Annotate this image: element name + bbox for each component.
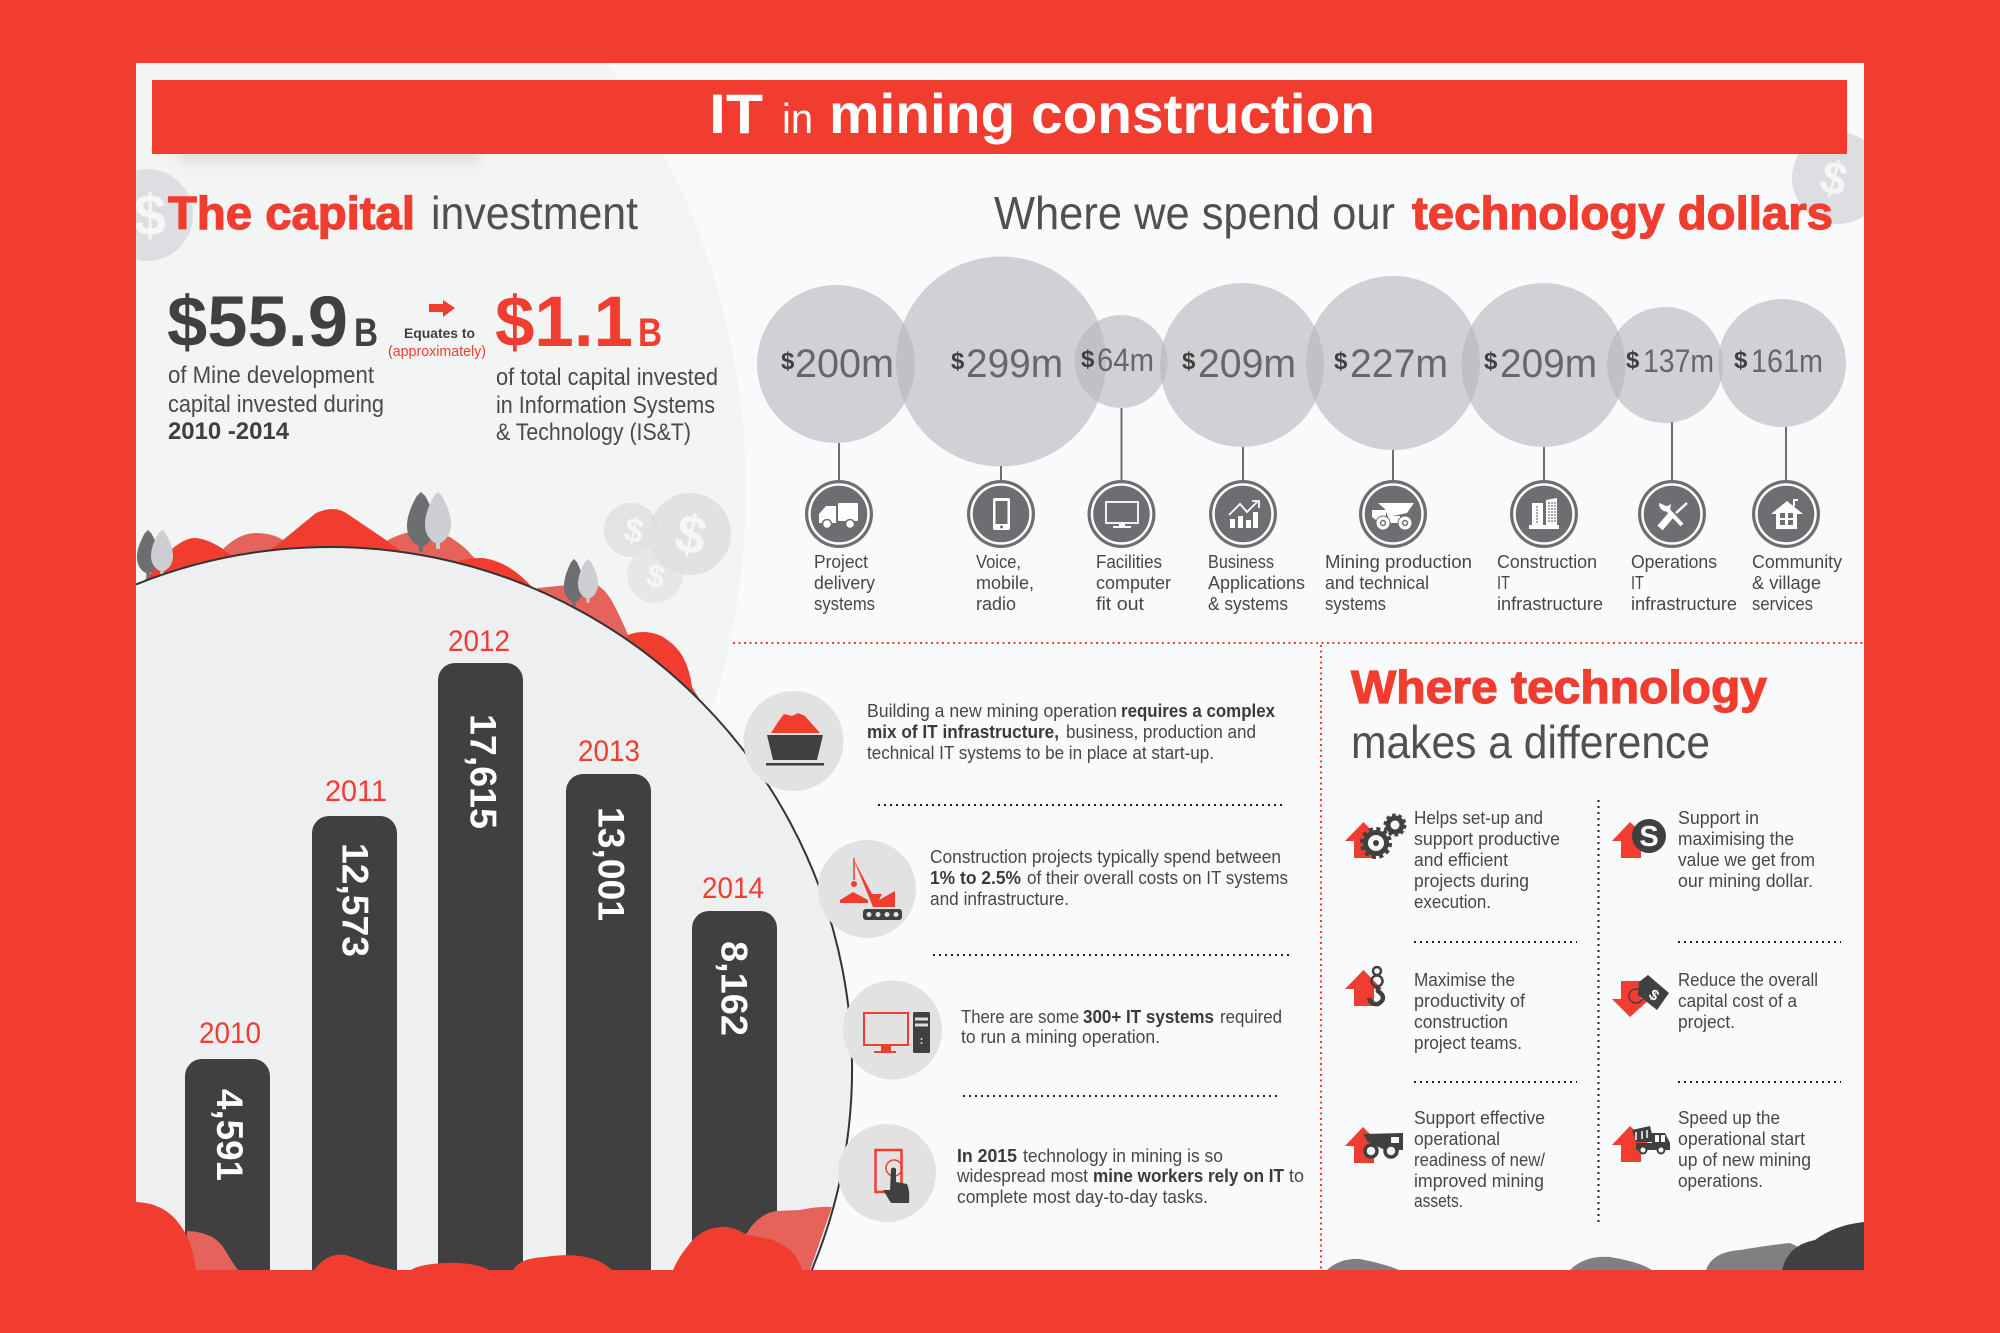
bubble row: spend per category: $ xyxy=(781,348,795,375)
category labels: Community xyxy=(1752,551,1843,572)
bubble row: spend per category: 137m xyxy=(1643,343,1714,379)
text: mine development: capital invested during xyxy=(168,391,384,418)
text: readiness: Support effective xyxy=(1414,1107,1545,1128)
category labels: systems xyxy=(1325,593,1386,614)
hills above the chart circle xyxy=(136,509,700,700)
title banner: in xyxy=(782,95,813,142)
chart circle background xyxy=(136,547,852,1270)
bar 2013: 13,001 xyxy=(590,807,632,921)
stat: 55.9B: $55.9 xyxy=(167,283,348,362)
icon: tools xyxy=(1638,480,1706,548)
category labels: radio xyxy=(976,593,1016,614)
bar 2012 xyxy=(438,625,523,1270)
heading: where technology makes a difference: makes a difference xyxy=(1351,716,1710,768)
bottom right grey hills xyxy=(1327,1222,1864,1270)
text: reduce cost xyxy=(1678,969,1818,1032)
text: 2015 workers: technology in mining is so xyxy=(1023,1145,1223,1166)
bubble row: spend per category: $ xyxy=(1081,346,1095,373)
category labels: IT xyxy=(1497,572,1510,593)
text: 300+ systems: 300+ IT systems xyxy=(1083,1006,1214,1027)
heading: the capital investment: The capital xyxy=(168,187,415,239)
bar 2012: 2012 xyxy=(448,625,510,658)
connector lines xyxy=(839,408,1786,480)
text: set-up: support productive xyxy=(1414,828,1560,849)
banner shadow xyxy=(180,150,480,162)
text: 2015 workers: In 2015 xyxy=(957,1145,1017,1166)
icon: business chart xyxy=(1209,480,1277,548)
category labels: mobile, xyxy=(976,572,1034,593)
title banner: IT xyxy=(709,82,763,145)
heading: where we spend xyxy=(994,187,1833,239)
bubble row: spend per category: 209m xyxy=(1500,342,1597,386)
text: productivity: Maximise the xyxy=(1414,969,1515,990)
icon: arrow down with price tag: $ xyxy=(1645,986,1663,1005)
bottom red hills xyxy=(136,1202,832,1270)
category labels: Facilities xyxy=(1096,551,1162,572)
bubble row: spend per category: $ xyxy=(951,348,965,375)
text: 2015 workers: mine workers rely on IT xyxy=(1093,1165,1285,1186)
bubble row: spend per category: 227m xyxy=(1350,342,1448,386)
title banner: mining construction xyxy=(829,82,1375,145)
stat: 1.1B: B xyxy=(638,311,662,355)
icon: arrow up with tipper truck xyxy=(1612,1126,1670,1162)
text: set-up xyxy=(1414,807,1560,912)
category labels: Project xyxy=(814,551,868,572)
text: complex mix: business, production and xyxy=(1066,721,1256,742)
bar 2014: 2014 xyxy=(702,872,764,905)
bubble row: spend per category: $ xyxy=(1182,348,1196,375)
category labels: Mining production xyxy=(1325,551,1472,572)
icon: tablet touch xyxy=(838,1124,936,1222)
arrow: equates to: Equates to xyxy=(404,325,475,341)
heading: the capital investment xyxy=(168,187,638,239)
category labels: services xyxy=(1752,593,1813,614)
text: value: Support in xyxy=(1678,807,1759,828)
bubble row: spend per category: $ xyxy=(1734,347,1748,374)
text: productivity: productivity of xyxy=(1414,990,1526,1011)
bubble row: spend per category: $ xyxy=(1334,348,1348,375)
text: complex mix: requires a complex xyxy=(1121,700,1276,721)
text: complex mix: mix of IT infrastructure, xyxy=(867,721,1059,742)
heading: where technology makes a difference: Where technology xyxy=(1351,661,1767,713)
text: 2015 workers: widespread most xyxy=(956,1165,1088,1186)
arrow: equates to xyxy=(388,300,486,360)
category labels: delivery xyxy=(814,572,876,593)
bubble row: spend per category: $ xyxy=(1484,348,1498,375)
text: speed up: operations. xyxy=(1678,1170,1763,1191)
icon: house xyxy=(1752,480,1820,548)
bubble row: spend per category: 64m xyxy=(1097,342,1154,378)
text: reduce cost: capital cost of a xyxy=(1678,990,1798,1011)
text: value: value we get from xyxy=(1678,849,1815,870)
category labels: Applications xyxy=(1208,572,1305,593)
category labels: Construction xyxy=(1497,551,1597,572)
icon: dollar coin top left xyxy=(136,169,193,261)
category labels: systems xyxy=(814,593,875,614)
text: 300+ systems xyxy=(961,1006,1282,1047)
icon: arrow up with dump truck xyxy=(1345,1127,1403,1163)
icon: arrow up with gears xyxy=(1345,815,1405,858)
text: value: maximising the xyxy=(1678,828,1794,849)
text: speed up: operational start xyxy=(1678,1128,1805,1149)
icon: mobile phone xyxy=(967,480,1035,548)
text: total capital invested: of total capital invested xyxy=(496,364,718,391)
bubble row: spend per category: 299m xyxy=(966,342,1063,386)
category labels: Business xyxy=(1208,551,1274,572)
text: total capital invested: in Information Systems xyxy=(496,392,715,419)
text: readiness xyxy=(1414,1107,1546,1211)
bar 2011 xyxy=(312,775,397,1270)
category labels: infrastructure xyxy=(1497,593,1603,614)
text: complex mix: technical IT systems to be in place at start-up. xyxy=(867,742,1214,763)
text: mine development: of Mine development xyxy=(168,362,374,389)
text: speed up: up of new mining xyxy=(1678,1149,1811,1170)
bar 2011: 12,573 xyxy=(334,843,376,957)
text: construction spend: 1% to 2.5% xyxy=(930,867,1021,888)
text: speed up: Speed up the xyxy=(1678,1107,1780,1128)
white content panel xyxy=(136,63,1864,1270)
text: 2015 workers xyxy=(956,1145,1304,1207)
icon: arrow up with dollar xyxy=(1612,819,1666,858)
icon: computer monitor xyxy=(1088,480,1156,548)
icon: arrow down with price tag xyxy=(1612,975,1669,1017)
bar chart: capital by year xyxy=(185,625,777,1270)
text: mine development xyxy=(168,362,384,445)
bar 2014: 8,162 xyxy=(714,941,754,1036)
text: complex mix: Building a new mining operation xyxy=(867,700,1117,721)
text: speed up xyxy=(1678,1107,1811,1191)
category labels: & systems xyxy=(1208,593,1288,614)
text: productivity xyxy=(1414,969,1526,1053)
icon: dollar coin top left: $ xyxy=(134,183,166,248)
icon: crane xyxy=(818,840,916,938)
heading: where we spend: Where we spend our xyxy=(994,187,1395,239)
icon: mining truck xyxy=(1359,480,1427,548)
text: construction spend: Construction projects typically spend between xyxy=(930,846,1281,867)
bar 2010: 4,591 xyxy=(209,1089,250,1181)
text: set-up: and efficient xyxy=(1414,849,1508,870)
text: 2015 workers: to xyxy=(1289,1165,1304,1186)
bar 2010 xyxy=(185,1017,270,1270)
heading: where technology makes a difference xyxy=(1351,661,1767,768)
icon: dollar coin top right: $ xyxy=(1815,150,1853,206)
text: set-up: Helps set-up and xyxy=(1414,807,1543,828)
bar 2010: 2010 xyxy=(199,1017,261,1050)
text: 300+ systems: to run a mining operation. xyxy=(961,1026,1160,1047)
text: 300+ systems: There are some xyxy=(961,1006,1079,1027)
heading: the capital investment: investment xyxy=(431,187,638,239)
category labels: & village xyxy=(1752,572,1821,593)
category labels: fit out xyxy=(1096,593,1144,614)
category labels: and technical xyxy=(1325,572,1429,593)
bar 2011: 2011 xyxy=(325,775,387,808)
bubble row: spend per category: $ xyxy=(1626,347,1640,374)
stat: 1.1B: $1.1 xyxy=(495,283,633,362)
text: 2015 workers: complete most day-to-day tasks. xyxy=(957,1186,1208,1207)
category labels: infrastructure xyxy=(1631,593,1737,614)
category labels: computer xyxy=(1096,572,1171,593)
text: total capital invested xyxy=(496,364,718,446)
text: value: our mining dollar. xyxy=(1678,870,1813,891)
bar 2012: 17,615 xyxy=(462,714,504,829)
bar 2013: 2013 xyxy=(578,735,640,768)
stat: 55.9B: B xyxy=(354,311,378,355)
text: set-up: execution. xyxy=(1414,891,1491,912)
icon: arrow up with dollar: S xyxy=(1639,821,1659,853)
icon: ore cart xyxy=(744,691,844,791)
category labels xyxy=(814,551,1843,614)
heading: where we spend: technology dollars xyxy=(1412,187,1833,239)
bubble row: spend per category: 209m xyxy=(1198,342,1296,386)
icon: desktop computer xyxy=(843,980,942,1080)
large pale background circle xyxy=(136,63,746,1100)
trees on the hills xyxy=(137,492,598,607)
category labels: IT xyxy=(1631,572,1644,593)
icon: stacked dollar coins: $ xyxy=(621,510,647,552)
bubble row: spend per category: 200m xyxy=(795,342,894,386)
text: readiness: assets. xyxy=(1414,1190,1463,1211)
text: set-up: projects during xyxy=(1414,870,1529,891)
bubble row: spend per category xyxy=(757,256,1846,466)
icon: dollar coin top right xyxy=(1792,133,1864,224)
text: 300+ systems: required xyxy=(1220,1006,1282,1027)
icon: arrow up with hook xyxy=(1345,967,1383,1006)
text: productivity: construction xyxy=(1414,1011,1508,1032)
text: readiness: readiness of new/ xyxy=(1414,1149,1546,1170)
text: reduce cost: project. xyxy=(1678,1011,1735,1032)
text: value xyxy=(1678,807,1815,891)
icon: stacked dollar coins xyxy=(604,493,731,603)
text: mine development: 2010 -2014 xyxy=(168,418,290,445)
title banner xyxy=(152,80,1847,154)
text: readiness: operational xyxy=(1414,1128,1500,1149)
icon: project delivery truck xyxy=(805,480,873,548)
arrow: equates to: (approximately) xyxy=(388,343,486,360)
text: total capital invested: & Technology (IS&T) xyxy=(496,419,691,446)
icon: buildings xyxy=(1510,480,1578,548)
bar 2014 xyxy=(692,872,777,1270)
text: construction spend: and infrastructure. xyxy=(930,888,1069,909)
icon: stacked dollar coins: $ xyxy=(643,557,668,595)
category labels: Operations xyxy=(1631,551,1717,572)
category labels: Voice, xyxy=(976,551,1021,572)
text: productivity: project teams. xyxy=(1414,1032,1522,1053)
bar 2013 xyxy=(566,735,651,1270)
text: construction spend xyxy=(930,846,1288,909)
text: readiness: improved mining xyxy=(1414,1170,1544,1191)
icon: stacked dollar coins: $ xyxy=(670,503,712,567)
text: complex mix xyxy=(867,700,1276,763)
bubble row: spend per category: 161m xyxy=(1751,343,1823,379)
text: construction spend: of their overall costs on IT systems xyxy=(1027,867,1288,888)
text: reduce cost: Reduce the overall xyxy=(1678,969,1818,990)
